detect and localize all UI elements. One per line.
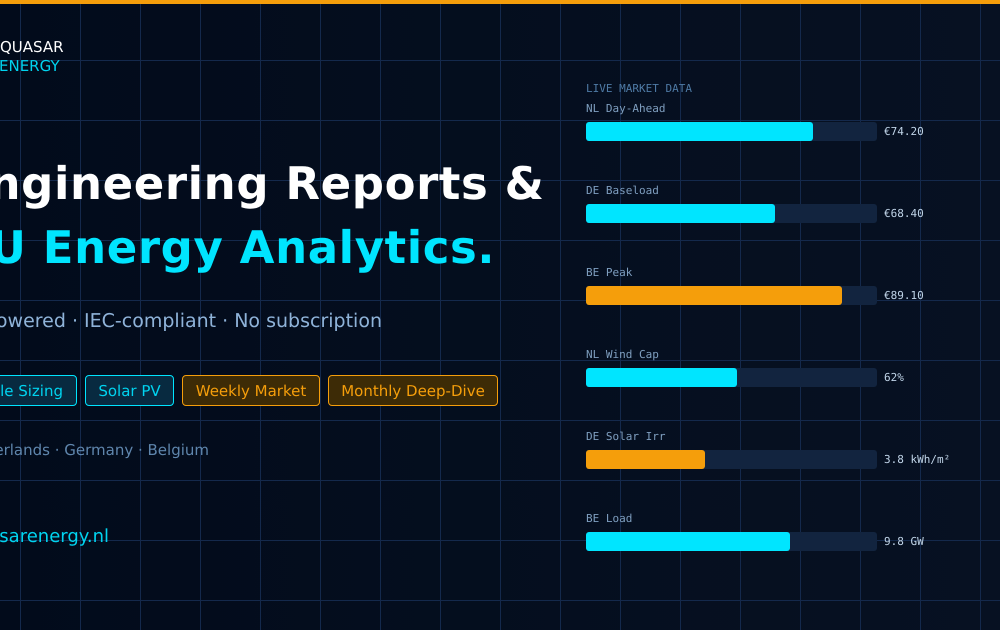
label: DE Baseload xyxy=(586,184,659,197)
label: NL Day-Ahead xyxy=(586,102,665,115)
value: 9.8 GW xyxy=(884,535,924,548)
logo line: QUASAR: QUASAR xyxy=(0,38,64,56)
chip: Monthly Deep-Dive: Monthly Deep-Dive xyxy=(341,382,485,400)
row: DE Solar Irr xyxy=(586,430,950,469)
row: BE Peak xyxy=(586,266,924,305)
chip: Weekly Market: Weekly Market xyxy=(196,382,306,400)
title xyxy=(0,157,544,274)
label: BE Load xyxy=(586,512,632,525)
bar xyxy=(586,122,877,141)
bar xyxy=(586,286,877,305)
chip: Monthly Deep-Dive xyxy=(328,375,498,406)
value: 3.8 kWh/m² xyxy=(884,453,950,466)
label: NL Wind Cap xyxy=(586,348,659,361)
chip: Cable Sizing xyxy=(0,375,77,406)
bar xyxy=(586,204,877,223)
label: DE Solar Irr xyxy=(586,430,665,443)
row: NL Day-Ahead xyxy=(586,102,924,141)
row: NL Wind Cap xyxy=(586,348,904,387)
chip: Weekly Market xyxy=(182,375,320,406)
panel heading: LIVE MARKET DATA xyxy=(586,82,692,95)
logo line: ENERGY: ENERGY xyxy=(0,57,60,75)
bar xyxy=(586,532,877,551)
bar xyxy=(586,450,877,469)
row: BE Load xyxy=(586,512,924,551)
chip: Solar PV xyxy=(85,375,174,406)
row: DE Baseload xyxy=(586,184,924,223)
panel: live market data xyxy=(586,82,950,551)
label: BE Peak xyxy=(586,266,632,279)
logo wordmark xyxy=(0,38,64,75)
bar xyxy=(586,368,877,387)
value: 62% xyxy=(884,371,904,384)
top accent bar xyxy=(0,0,1000,4)
value: €68.40 xyxy=(884,207,924,220)
chip: Solar PV: Solar PV xyxy=(98,382,161,400)
value: €89.10 xyxy=(884,289,924,302)
value: €74.20 xyxy=(884,125,924,138)
service chips xyxy=(0,375,498,406)
